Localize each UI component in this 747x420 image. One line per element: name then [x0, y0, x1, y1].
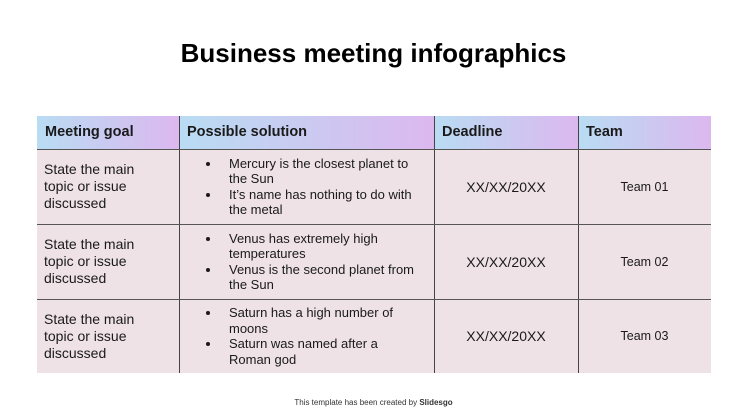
header: deadline: [434, 116, 578, 149]
row 1 deadline: XX/XX/20XX: [466, 178, 546, 194]
row 2 team: [578, 224, 711, 299]
row 3 team: [578, 299, 711, 373]
header: team: [578, 116, 711, 149]
row 2 team: Team 02: [621, 254, 668, 268]
row 1 solution: Mercury is the closest planet to the Sun: [229, 156, 408, 186]
row 2 solution: Venus is the second planet from the Sun: [229, 262, 414, 292]
row 2 deadline: [434, 224, 578, 299]
row 3 solution: Saturn was named after a Roman god: [229, 336, 378, 366]
row 1 team: [578, 149, 711, 224]
row 3 goal: topic or issue: [44, 328, 126, 344]
row 3 deadline: [434, 299, 578, 373]
row 3 team: Team 03: [621, 329, 668, 343]
header: possible solution: Possible solution: [187, 124, 307, 140]
table: [37, 116, 711, 373]
row 1 goal: [37, 149, 179, 224]
row 2 solution: [179, 224, 434, 299]
row 2 deadline: XX/XX/20XX: [466, 254, 546, 270]
row 3 goal: [37, 299, 179, 373]
row 3 solution: [179, 299, 434, 373]
row 2 solution: Venus has extremely high temperatures: [229, 230, 378, 261]
row 1 solution: It’s name has nothing to do with the metal: [229, 186, 412, 217]
footer credit: This template has been created by Slidesgo: [294, 398, 453, 407]
row 3 goal: State the main: [44, 310, 134, 326]
header: possible solution: [179, 116, 434, 149]
row 1 goal: topic or issue: [44, 178, 126, 194]
row 2 goal: discussed: [44, 270, 106, 286]
header: meeting goal: [37, 116, 179, 149]
row 3 deadline: XX/XX/20XX: [466, 328, 546, 344]
row 1 goal: State the main: [44, 161, 134, 177]
header: meeting goal: Meeting goal: [45, 124, 134, 140]
row 2 goal: [37, 224, 179, 299]
header: team: Team: [586, 124, 623, 140]
header: deadline: Deadline: [442, 124, 502, 140]
row 3 solution: Saturn has a high number of moons: [229, 305, 393, 336]
row 2 goal: topic or issue: [44, 253, 126, 269]
title: Business meeting infographics: [181, 38, 566, 68]
row 1 goal: discussed: [44, 195, 106, 211]
row 2 goal: State the main: [44, 236, 134, 252]
row 1 solution: [179, 149, 434, 224]
row 1 team: Team 01: [621, 180, 668, 194]
row 1 deadline: [434, 149, 578, 224]
row 3 goal: discussed: [44, 344, 106, 360]
